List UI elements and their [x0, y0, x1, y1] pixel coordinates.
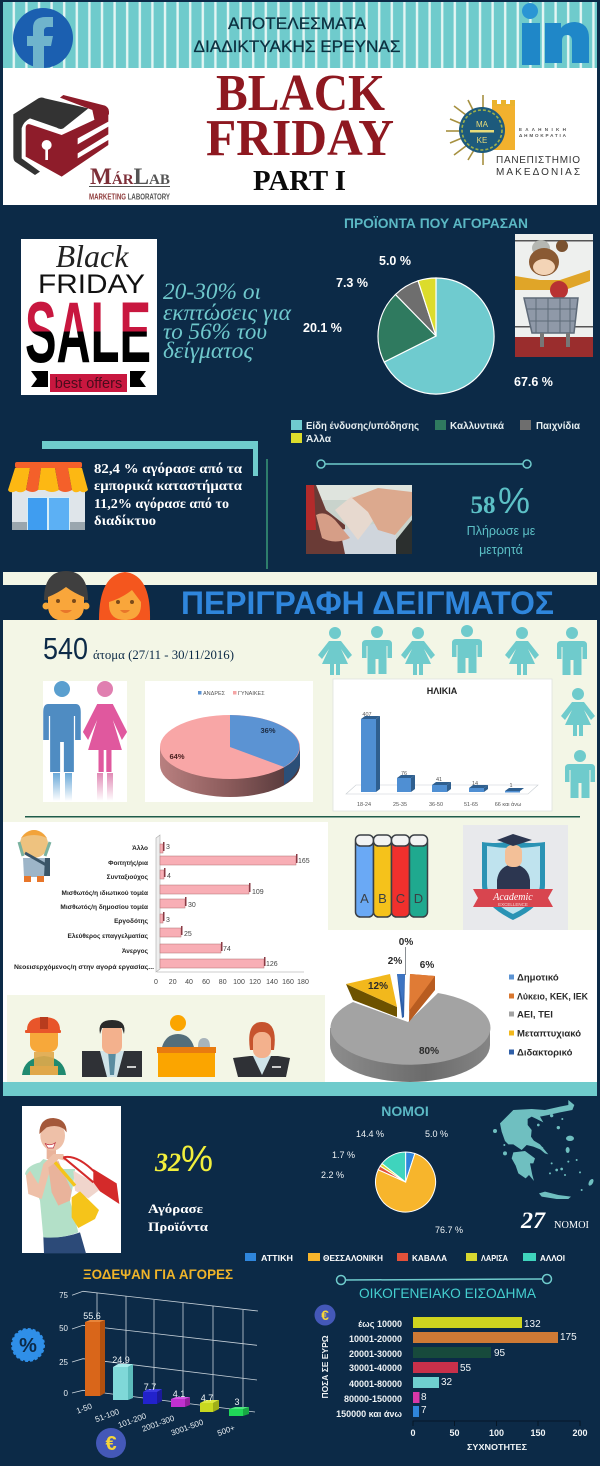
- logo: MarLab: [13, 95, 170, 202]
- legend: education: Δημοτικό: [517, 972, 559, 984]
- bar chart: income: έως 10000: [358, 1319, 402, 1329]
- icon: books: B: [378, 891, 387, 906]
- legend: regions: ΛΑΡΙΣΑ: [481, 1253, 508, 1263]
- image: man and woman figures: [43, 681, 127, 802]
- text: store versus online purchases: 11,2% αγόρασε από το: [94, 496, 229, 511]
- chart: spending 3D bars: 25: [59, 1358, 69, 1367]
- legend: regions: ΑΛΛΟΙ: [540, 1253, 565, 1263]
- bar chart: occupation: 120: [249, 979, 261, 986]
- pie chart: education: [330, 937, 490, 1082]
- heading: family income: ΟΙΚΟΓΕΝΕΙΑΚΟ ΕΙΣΟΔΗΜΑ: [359, 1285, 537, 1301]
- chart: spending 3D bars: [59, 1291, 258, 1438]
- panel: demographics: [3, 620, 597, 822]
- bar chart: income: 150000 και άνω: [336, 1409, 402, 1419]
- legend: education: [509, 972, 588, 1058]
- pie chart: education: 0%: [399, 937, 413, 948]
- band: cream divider: [3, 572, 597, 585]
- image: academic excellence badge: EXCELLENCE: [498, 902, 528, 907]
- logo: University of Macedonia: ΜΑΚΕΔΟΝΙΑΣ: [496, 167, 580, 178]
- image: black friday sale poster: SALE: [25, 285, 151, 381]
- icon: percent badge: %: [19, 1335, 37, 1357]
- pie labels: products: [303, 254, 553, 389]
- stat: 32 percent bought: 32: [154, 1148, 181, 1177]
- bar chart: income: 10001-20000: [349, 1334, 402, 1344]
- panel: header band: [3, 2, 597, 68]
- bar chart: income: 7: [421, 1405, 427, 1416]
- pie chart: gender: 64%: [169, 752, 185, 761]
- icon: receptionist desk: [157, 1015, 216, 1077]
- pie labels: regions: 5.0 %: [425, 1129, 448, 1139]
- bar chart: age: 36-50: [429, 802, 443, 808]
- image: cash payment photo: [306, 485, 412, 554]
- heading: regions: ΝΟΜΟΙ: [381, 1103, 429, 1119]
- stat: 540 respondents: 540: [43, 631, 88, 666]
- bar chart: occupation: 25: [184, 931, 192, 938]
- bar chart: income: 100: [489, 1428, 504, 1438]
- bar chart: occupation: Συνταξιούχος: [107, 874, 149, 881]
- icon: store: [8, 462, 88, 530]
- pie chart: education: 12%: [368, 981, 388, 992]
- bar chart: income: 95: [494, 1348, 506, 1359]
- image: academic excellence badge: Academic: [492, 892, 533, 903]
- bar chart: occupation: 30: [188, 902, 196, 909]
- bar chart: income: 20001-30000: [349, 1349, 402, 1359]
- chart: spending 3D bars: 2001-300: [141, 1413, 176, 1434]
- icon: businessman: [82, 1020, 142, 1077]
- bar chart: income: ΠΟΣΑ ΣΕ ΕΥΡΩ: [321, 1335, 330, 1399]
- bar chart: income: 55: [460, 1363, 472, 1374]
- heading: sample description: ΠΕΡΙΓΡΑΦΗ ΔΕΙΓΜΑΤΟΣ: [181, 585, 554, 621]
- icon: woman face: [99, 572, 150, 620]
- panel: spending chart: [12, 1266, 258, 1458]
- bar chart: income: 0: [410, 1428, 416, 1438]
- image: black friday sale poster: Black: [56, 238, 129, 274]
- chart: spending 3D bars: 3001-500: [170, 1417, 205, 1438]
- icon: businesswoman: [233, 1022, 290, 1077]
- text: bought products: Προϊόντα: [148, 1219, 209, 1234]
- bar chart: occupation: 74: [223, 946, 231, 953]
- panel: sample description heading: [42, 571, 554, 621]
- panel: white title area: [3, 65, 597, 205]
- chart: spending 3D bars: 50: [59, 1324, 69, 1333]
- legend: products: [291, 420, 581, 445]
- map: Greece: [493, 1100, 595, 1199]
- legend: regions: ΘΕΣΣΑΛΟΝΙΚΗ: [323, 1253, 383, 1263]
- stat: 27 regions: ΝΟΜΟΙ: [554, 1220, 589, 1231]
- image: black friday sale poster: best offers: [55, 376, 122, 392]
- bar chart: age: 18-24: [357, 802, 371, 808]
- panel: purchases and regions: [22, 1100, 595, 1263]
- pie chart: regions: [376, 1152, 436, 1212]
- panel: family income: [314, 1274, 588, 1452]
- bar chart: occupation: Μισθωτός/η ιδιωτικού τομέα: [62, 890, 148, 897]
- bar chart: income: 150: [530, 1428, 546, 1438]
- bar chart: occupation: 3: [166, 917, 170, 924]
- bar chart: income: 32: [441, 1377, 453, 1388]
- legend: education: Διδακτορικό: [517, 1048, 573, 1058]
- legend: products: Άλλα: [306, 434, 332, 445]
- pie labels: regions: 1.7 %: [332, 1150, 355, 1160]
- bar chart: income: ΣΥΧΝΟΤΗΤΕΣ: [467, 1443, 527, 1452]
- pie chart: gender: [145, 681, 313, 802]
- text: discount callout: [163, 279, 292, 363]
- bar chart: occupation: 4: [167, 873, 171, 880]
- icons: people row: [318, 625, 595, 798]
- logo: University of Macedonia: [446, 95, 580, 178]
- bar chart: age: 76: [401, 771, 407, 777]
- stat: 58 percent cash: Πλήρωσε με: [467, 524, 536, 538]
- icon: student boy: [19, 830, 50, 882]
- bar chart: income: 80000-150000: [344, 1394, 402, 1404]
- icon: euro coin: €: [105, 1433, 117, 1455]
- frame: teal corner bracket: [42, 441, 258, 476]
- chart: spending 3D bars: 3: [234, 1397, 240, 1407]
- bar chart: age: 51-65: [464, 802, 478, 808]
- stat: 58 percent cash: [467, 480, 536, 557]
- connector: teal line: [317, 460, 531, 468]
- stat: 58 percent cash: 58: [470, 492, 496, 519]
- bar chart: occupation: 80: [219, 979, 227, 986]
- logo: University of Macedonia: ΔΗΜΟΚΡΑΤΙΑ: [519, 133, 567, 138]
- text: discount callout: δείγματος: [163, 338, 254, 363]
- bar chart: occupation: [14, 835, 310, 986]
- chart: spending 3D bars: 4.7: [201, 1393, 213, 1403]
- bar chart: occupation: 60: [202, 979, 210, 986]
- bar chart: occupation: 160: [282, 979, 294, 986]
- icon: euro coin small: [314, 1304, 336, 1326]
- pie chart: products: [378, 278, 494, 394]
- stat: 540 respondents: άτομα (27/11 - 30/11/2016): [93, 648, 234, 662]
- panel: education: [328, 820, 597, 1082]
- legend: regions: ΚΑΒΑΛΑ: [412, 1253, 447, 1263]
- bar chart: occupation: Άλλο: [132, 844, 148, 852]
- bar chart: occupation: Ελεύθερος επαγγελματίας: [68, 932, 149, 940]
- panel: products section: [8, 215, 593, 569]
- bar chart: occupation: 109: [252, 889, 264, 896]
- image: black friday sale poster: [21, 238, 157, 395]
- logo: University of Macedonia: ΜΑ: [476, 120, 489, 129]
- logo: University of Macedonia: ΕΛΛΗΝΙΚΗ: [519, 127, 567, 132]
- bar chart: occupation: 165: [298, 858, 310, 865]
- chart: spending 3D bars: 75: [59, 1291, 69, 1300]
- bar chart: occupation: 126: [266, 961, 278, 968]
- text: discount callout: το 56% του: [163, 319, 267, 344]
- stat: 27 regions: 27: [520, 1208, 547, 1233]
- bar chart: income: 30001-40000: [349, 1363, 402, 1373]
- image: shopping cart illustration: [515, 234, 593, 357]
- text: discount callout: 20-30% οι: [163, 279, 261, 304]
- title: survey results: ΔΙΑΔΙΚΤΥΑΚΗΣ ΕΡΕΥΝΑΣ: [194, 38, 400, 56]
- pie chart: gender: 36%: [260, 726, 276, 735]
- bar chart: income: [321, 1317, 588, 1452]
- heading: Black Friday: [206, 65, 394, 197]
- bar chart: age: 407: [362, 712, 372, 718]
- legend: regions: [245, 1253, 565, 1263]
- title: survey results: [194, 15, 400, 56]
- bar chart: occupation: 40: [185, 979, 193, 986]
- bar chart: age: ΗΛΙΚΙΑ: [427, 686, 458, 696]
- pie labels: regions: [321, 1129, 463, 1235]
- bar chart: age: 14: [472, 781, 478, 787]
- bar chart: occupation: Φοιτητής/ρια: [108, 860, 148, 867]
- legend: products: Καλλυντικά: [450, 421, 505, 432]
- pie chart: education: 6%: [420, 960, 434, 971]
- chart: spending 3D bars: 500+: [216, 1423, 236, 1438]
- legend: products: Είδη ένδυσης/υπόδησης: [306, 421, 419, 432]
- text: store versus online purchases: 82,4 % αγόρασε από τα: [94, 461, 242, 476]
- pie chart: gender: ΓΥΝΑΙΚΕΣ: [238, 691, 265, 697]
- icon: books: D: [414, 891, 423, 906]
- icon: construction worker: [22, 1017, 66, 1075]
- stat: 32 percent bought: %: [181, 1138, 213, 1179]
- icon: percent badge: [12, 1329, 44, 1361]
- bar chart: income: 8: [421, 1392, 427, 1403]
- panel: occupation: [3, 822, 328, 1082]
- heading: Black Friday: PART I: [253, 165, 346, 197]
- text: store versus online purchases: διαδίκτυο: [94, 513, 156, 528]
- pie chart: education: 80%: [419, 1046, 439, 1057]
- bar chart: age: 41: [436, 777, 442, 783]
- pie labels: regions: 14.4 %: [356, 1129, 384, 1139]
- chart: spending 3D bars: 0: [64, 1389, 69, 1398]
- heading: products bought: ΠΡΟΪΟΝΤΑ ΠΟΥ ΑΓΟΡΑΣΑΝ: [344, 215, 528, 231]
- icon: facebook: [13, 8, 73, 68]
- chart: spending 3D bars: 4.1: [173, 1389, 185, 1399]
- bar chart: income: 50: [449, 1428, 460, 1438]
- logo: MarLab: MÁRLAB: [90, 164, 170, 189]
- bar chart: income: 175: [560, 1332, 577, 1343]
- pie labels: products: 7.3 %: [336, 276, 368, 290]
- bar chart: income: 40001-80000: [349, 1379, 402, 1389]
- title: survey results: ΑΠΟΤΕΛΕΣΜΑΤΑ: [228, 15, 366, 33]
- band: teal divider: [3, 1082, 597, 1096]
- text: discount callout: εκπτώσεις για: [163, 300, 292, 325]
- bar chart: occupation: Εργοδότης: [114, 918, 149, 925]
- bar chart: age: [333, 679, 552, 811]
- chart: spending 3D bars: 7.7: [144, 1382, 156, 1392]
- bar chart: occupation: 0: [154, 979, 158, 986]
- legend: products: Παιχνίδια: [536, 421, 581, 432]
- heading: Black Friday: FRIDAY: [206, 110, 394, 167]
- chart: spending 3D bars: 101-200: [117, 1411, 148, 1430]
- bar chart: occupation: 3: [166, 844, 170, 851]
- bar chart: income: 132: [524, 1319, 541, 1330]
- heading: Black Friday: BLACK: [216, 65, 386, 122]
- stat: 58 percent cash: μετρητά: [479, 543, 523, 557]
- text: bought products: [148, 1201, 209, 1234]
- pie labels: regions: 76.7 %: [435, 1225, 463, 1235]
- chart: spending 3D bars: 1-50: [75, 1401, 94, 1416]
- icon: linkedin: [522, 3, 589, 65]
- icon: books: A: [360, 891, 369, 906]
- icon: books: C: [396, 891, 405, 906]
- image: black friday sale poster: FRIDAY: [38, 269, 145, 299]
- bar chart: occupation: Νεοεισερχόμενος/η στην αγορά εργασίας...: [14, 964, 154, 971]
- stat: 32 percent bought: [154, 1138, 213, 1179]
- pie chart: gender: ΑΝΔΡΕΣ: [203, 691, 226, 697]
- heading: spent on purchases: ΞΟΔΕΨΑΝ ΓΙΑ ΑΓΟΡΕΣ: [83, 1266, 233, 1282]
- bar chart: occupation: Μισθωτός/η δημοσίου τομέα: [60, 904, 148, 911]
- bar chart: occupation: Άνεργος: [122, 948, 149, 955]
- bar chart: occupation: 100: [233, 979, 245, 986]
- chart: spending 3D bars: 51-100: [94, 1407, 121, 1424]
- connector: teal line: [336, 1274, 552, 1284]
- chart: spending 3D bars: 24.9: [112, 1355, 130, 1365]
- pie labels: products: 5.0 %: [379, 254, 411, 268]
- stat: 540 respondents: [43, 631, 234, 666]
- bar chart: age: 25-35: [393, 802, 407, 808]
- legend: education: Μεταπτυχιακό: [517, 1028, 581, 1040]
- logo: University of Macedonia: ΚΕ: [477, 136, 487, 145]
- image: academic excellence badge: [463, 825, 568, 930]
- chart: spending 3D bars: 55.6: [83, 1311, 101, 1321]
- icon: euro coin: [96, 1428, 126, 1458]
- pie labels: products: 20.1 %: [303, 321, 342, 335]
- legend: education: ΑΕΙ, ΤΕΙ: [517, 1010, 553, 1020]
- stat: 27 regions: [520, 1208, 589, 1233]
- bar chart: age: 1: [509, 783, 513, 789]
- icon: euro coin small: €: [321, 1307, 329, 1323]
- bar chart: occupation: 140: [266, 979, 278, 986]
- bar chart: income: 200: [572, 1428, 588, 1438]
- icon: books: [356, 835, 428, 917]
- image: woman with shopping bags: [22, 1106, 121, 1253]
- text: store versus online purchases: [94, 461, 242, 528]
- icon: man face: [42, 571, 90, 621]
- stat: 58 percent cash: %: [498, 480, 530, 521]
- logo: MarLab: MARKETING LABORATORY: [89, 192, 170, 202]
- bar chart: age: 66 και άνω: [495, 801, 522, 808]
- bar chart: occupation: 180: [297, 979, 309, 986]
- legend: education: Λύκειο, ΚΕΚ, ΙΕΚ: [517, 992, 588, 1002]
- text: store versus online purchases: εμπορικά καταστήματα: [94, 478, 242, 493]
- pie chart: education: 2%: [388, 956, 402, 967]
- legend: regions: ΑΤΤΙΚΗ: [261, 1253, 293, 1263]
- logo: University of Macedonia: ΠΑΝΕΠΙΣΤΗΜΙΟ: [496, 155, 580, 166]
- bar chart: occupation: 20: [169, 979, 177, 986]
- text: bought products: Αγόρασε: [148, 1201, 203, 1216]
- pie labels: products: 67.6 %: [514, 375, 553, 389]
- pie labels: regions: 2.2 %: [321, 1170, 344, 1180]
